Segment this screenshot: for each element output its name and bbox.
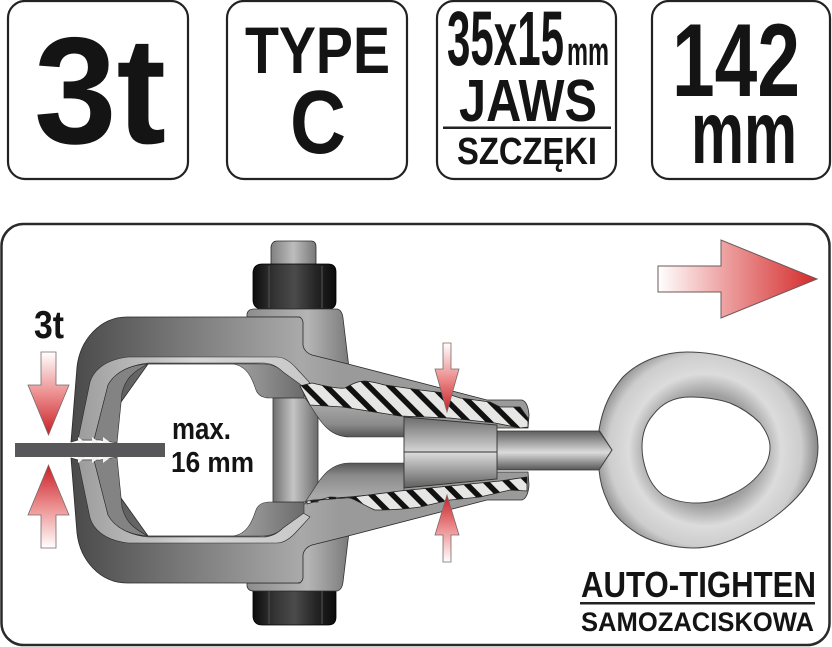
- bottom nut: [253, 591, 336, 625]
- upper jaw: [71, 317, 529, 443]
- arrow: upper clamp force: [28, 352, 69, 435]
- upper inner tube: [305, 398, 404, 437]
- clamp boss: [247, 309, 349, 591]
- card: jaws size: [437, 0, 616, 179]
- lower jaw: [71, 457, 529, 583]
- card: 3t capacity: 3t: [34, 6, 166, 176]
- panel: tool diagram: [2, 224, 830, 645]
- arrow: lower sleeve force: [435, 495, 459, 562]
- label: max. 16 mm: max.: [172, 411, 231, 446]
- icon: direction arrow: [658, 240, 817, 318]
- card: type C: [227, 1, 407, 179]
- arrow: upper sleeve force: [435, 343, 459, 412]
- card: type C: C: [290, 73, 346, 173]
- pivot pin: [273, 398, 318, 502]
- eye ring: [599, 352, 818, 548]
- label: 3t: 3t: [34, 304, 64, 347]
- upper hatched spring: [300, 381, 528, 428]
- card: type C: TYPE: [245, 13, 390, 87]
- label: max. 16 mm: [171, 411, 254, 479]
- card: 142 mm: [652, 1, 830, 182]
- label: max. 16 mm: 16 mm: [171, 447, 254, 479]
- lower inner tube: [305, 463, 404, 502]
- bolt and top nut: [253, 241, 336, 309]
- card: jaws size: JAWS: [459, 68, 597, 134]
- label: auto-tighten: [580, 564, 816, 637]
- card: jaws size: SZCZĘKI: [457, 131, 597, 173]
- lower hatched spring: [307, 477, 527, 510]
- sleeve: [404, 417, 497, 488]
- card: jaws size: mm: [567, 30, 609, 74]
- arrow: lower clamp force: [28, 465, 69, 548]
- clamped plate with jaw teeth: [15, 437, 165, 463]
- centre rod: [497, 431, 612, 470]
- label: auto-tighten: SAMOZACISKOWA: [581, 607, 814, 637]
